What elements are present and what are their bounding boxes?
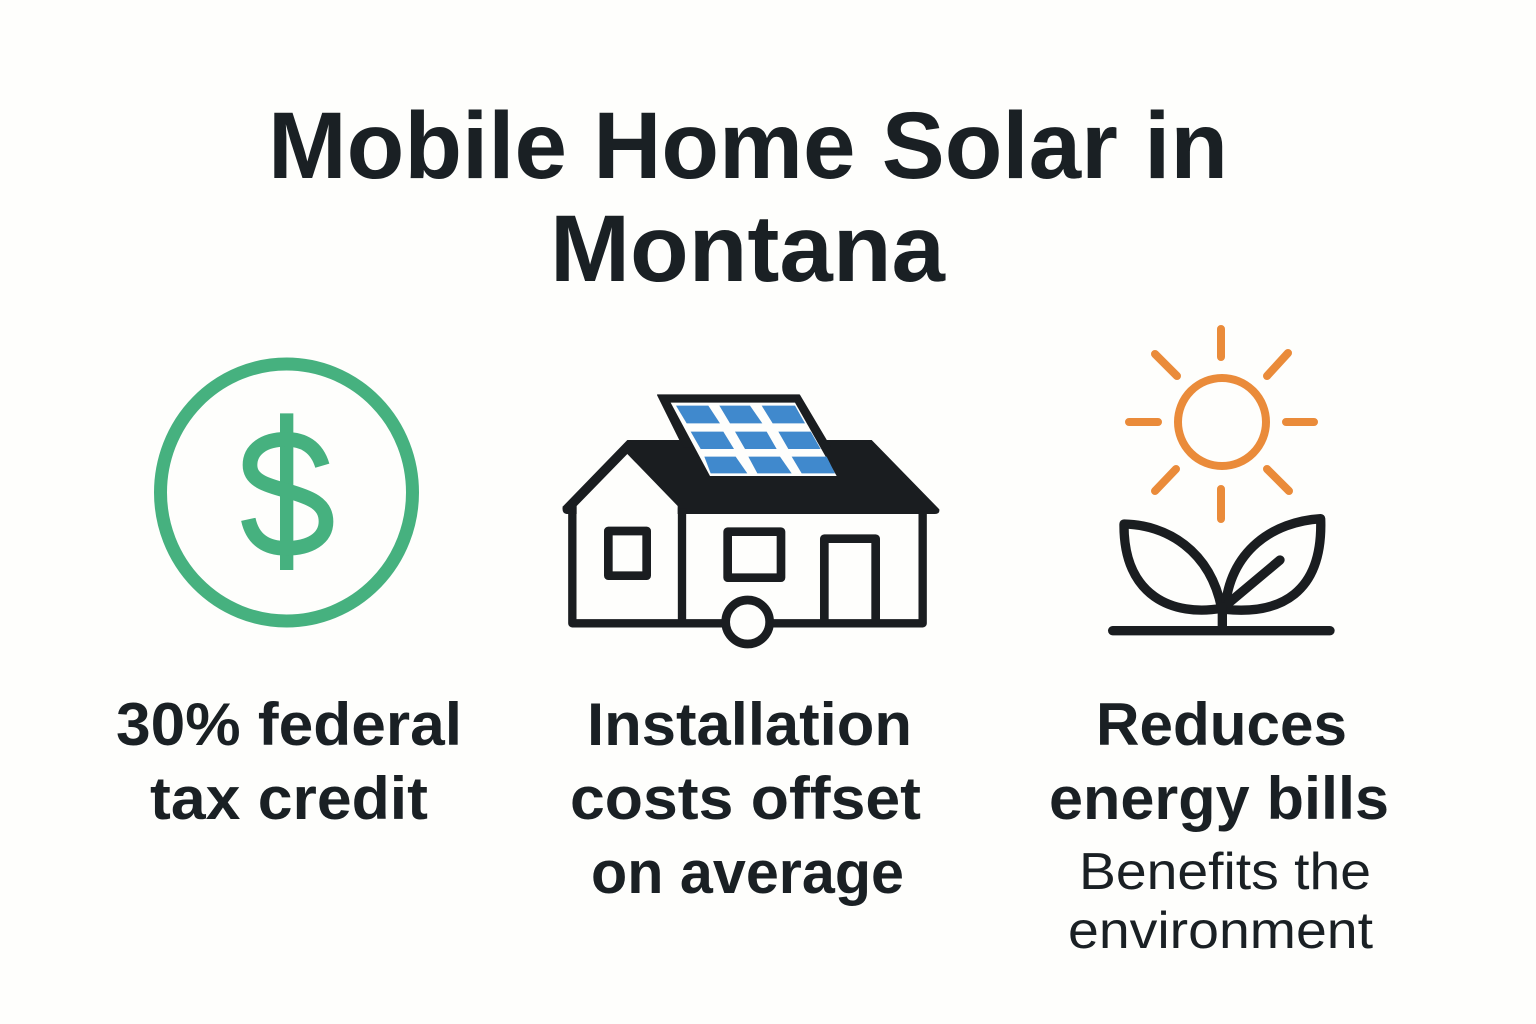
icon: dollar coin <box>160 364 412 621</box>
sun <box>1129 329 1314 519</box>
panel: mobile home <box>562 395 939 906</box>
label: installation costs: costs offset <box>570 765 921 832</box>
icon: sun over plant <box>1113 329 1330 631</box>
label: 30% federal tax credit: 30% federal <box>116 691 462 758</box>
door <box>824 539 876 623</box>
walls <box>572 508 923 623</box>
label: benefits the environment <box>1068 843 1374 960</box>
label: installation costs: Installation <box>587 691 912 758</box>
window left <box>608 531 647 576</box>
label: 30% federal tax credit <box>116 691 462 832</box>
roof <box>562 440 939 514</box>
label: 30% federal tax credit: tax credit <box>150 765 428 832</box>
label: reduces energy bills <box>1049 691 1389 832</box>
panel: tax credit <box>116 364 462 832</box>
label: installation costs: on average <box>591 839 904 906</box>
label: reduces energy bills: Reduces <box>1096 691 1347 758</box>
solar panel <box>658 395 837 476</box>
label: reduces energy bills: energy bills <box>1049 765 1389 832</box>
gable opening <box>577 454 678 514</box>
title: Montana <box>550 196 946 302</box>
label: benefits the environment: environment <box>1068 902 1374 960</box>
panel: energy and environment <box>1049 329 1389 960</box>
leaves and ground <box>1113 519 1330 631</box>
icon: mobile home with solar panel <box>562 395 939 644</box>
window middle <box>728 532 781 578</box>
title: Mobile Home Solar in <box>268 93 1228 199</box>
label: installation costs <box>570 691 921 906</box>
wheel <box>726 600 770 644</box>
label: benefits the environment: Benefits the <box>1079 843 1371 901</box>
title <box>268 93 1228 302</box>
